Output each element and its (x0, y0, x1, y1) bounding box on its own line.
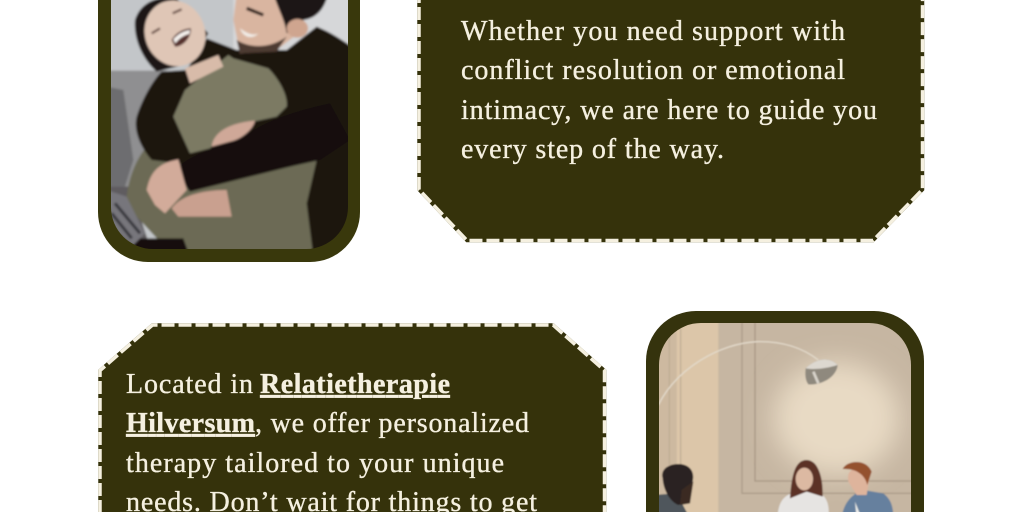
panel: couple photo frame (98, 0, 360, 267)
text: location message (126, 369, 537, 512)
text: support message: Whether you need support with (461, 16, 845, 47)
photo: laughing couple embracing on a sofa (111, 0, 348, 249)
text: location message: Relatietherapie (260, 369, 450, 400)
panel: therapy session photo frame (646, 311, 924, 512)
text: support message: every step of the way. (461, 134, 724, 165)
text: location message: therapy tailored to your unique (126, 448, 504, 479)
text: location message: Hilversum (126, 408, 255, 439)
text: support message: conflict resolution or emotional (461, 55, 845, 86)
panel: bottom text card (100, 325, 604, 512)
text: support message: intimacy, we are here to guide you (461, 95, 877, 126)
text: support message (461, 16, 877, 165)
text: location message: , we offer personalized (255, 408, 529, 439)
photo: couple with therapist under a floor lamp (653, 318, 917, 512)
text: location message: Located in (126, 369, 253, 400)
panel: top text card (419, 0, 922, 240)
